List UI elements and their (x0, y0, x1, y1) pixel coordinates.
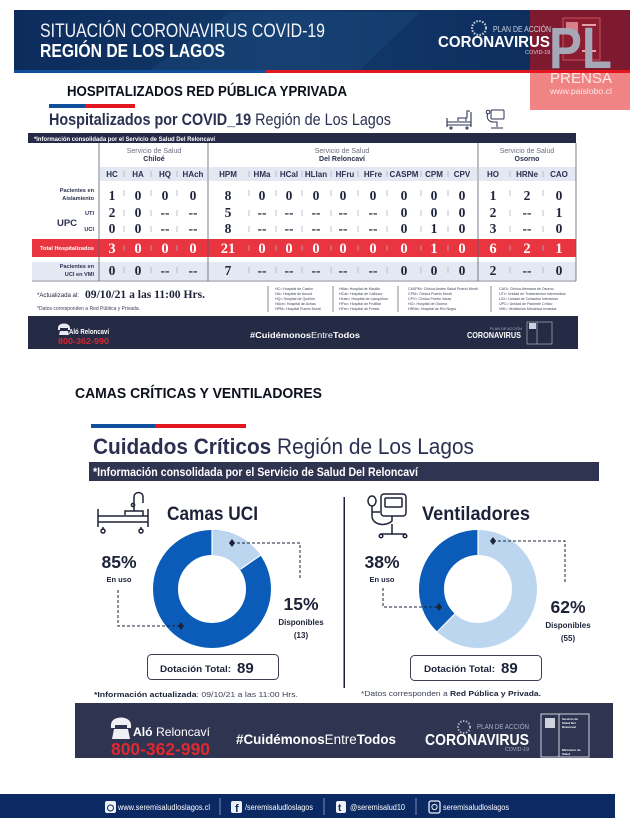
instagram link (429, 801, 509, 813)
row: VMI: -- (284, 263, 294, 278)
hospital table panel (28, 133, 576, 281)
row: UCI: -- (188, 221, 198, 236)
column header band: HCal (280, 170, 298, 179)
row: aislamiento: 0 (431, 188, 438, 203)
abbreviations legend: CPM= Clínica Puerto Montt (408, 292, 452, 296)
row: UCI: 0 (135, 221, 142, 236)
column header band: HMa (254, 170, 271, 179)
row: UTI: -- (338, 205, 348, 220)
total box: ventiladores: Dotación Total: (424, 664, 495, 675)
row: UCI: -- (284, 221, 294, 236)
abbreviations legend: CASPM= Clínica Andes Salud Puerto Montt (408, 287, 478, 291)
callout: 62% disponibles: (55) (561, 634, 575, 643)
row: total: 6 (489, 241, 497, 257)
abbreviations legend: HPM= Hospital Puerto Montt (275, 307, 321, 311)
abbreviations legend: HRNe= Hospital de Río Negro (408, 307, 456, 311)
row: aislamiento: 1 (109, 188, 116, 203)
row: UTI: 1 (556, 205, 563, 220)
row: VMI: -- (188, 263, 198, 278)
row: total: 0 (189, 241, 197, 257)
social media footer (0, 794, 615, 818)
alo reloncavi small: Aló Reloncaví (69, 329, 110, 336)
total box: camas UCI (148, 654, 278, 680)
row: UCI: -- (522, 221, 532, 236)
row labels: UCI (84, 227, 94, 233)
row: UCI: 0 (109, 221, 116, 236)
row: total: 1 (430, 241, 438, 257)
row: VMI: -- (312, 263, 320, 278)
VMI row band (32, 262, 576, 280)
row labels: UCI en VMI (65, 272, 94, 278)
row: UTI: 5 (225, 205, 232, 220)
row: VMI: 0 (459, 263, 466, 278)
row: aislamiento: 0 (135, 188, 142, 203)
row: VMI: 0 (109, 263, 116, 278)
row labels: Pacientes en (60, 264, 95, 270)
abbreviations legend: HFru= Hospital de Frutillar (339, 302, 382, 306)
row: total: 0 (312, 241, 320, 257)
abbreviations legend: HCal= Hospital de Calbuco (339, 292, 382, 296)
abbreviations legend: UCI= Unidad de Cuidados Intensivos (499, 297, 558, 301)
abbreviations legend: UPC= Unidad de Paciente Crítico (499, 302, 552, 306)
row labels: UPC (57, 218, 77, 229)
total row band (32, 239, 576, 257)
government logo: Servicio de (562, 717, 578, 721)
row: total: 0 (339, 241, 347, 257)
watermark url: www.paislobo.cl (549, 87, 612, 96)
donut chart: ventiladores (412, 523, 544, 655)
total box: camas UCI: Dotación Total: (160, 664, 231, 675)
service group headers: Osorno (515, 156, 539, 163)
website link (105, 801, 210, 813)
abbreviations legend: HC= Hospital de Castro (275, 287, 313, 291)
table title: Hospitalizados por COVID_19 Región de Los Lagos (49, 110, 391, 129)
update note (37, 287, 205, 312)
service group headers: Servicio de Salud (500, 148, 554, 155)
row: total: 0 (161, 241, 169, 257)
phone number small: 800-362-990 (58, 336, 109, 346)
row: VMI: -- (258, 263, 266, 278)
row: aislamiento: 0 (259, 188, 266, 203)
phone number: 800-362-990 (111, 739, 210, 759)
update note: 09/10/21 a las 11:00 Hrs. (85, 287, 205, 301)
coronavirus logo small: PLAN DE ACCIÓN (490, 326, 522, 331)
PRENSA label: PRENSA (550, 70, 612, 87)
row labels: Aislamiento (62, 196, 95, 202)
service group headers: Servicio de Salud (315, 148, 369, 155)
row: aislamiento: 0 (313, 188, 320, 203)
hashtag: #CuidémonosEntreTodos (236, 732, 396, 747)
row: UCI: -- (258, 221, 266, 236)
row: aislamiento: 0 (286, 188, 293, 203)
abbreviations legend: CAO= Clínica Alemana de Osorno (499, 287, 554, 291)
service group headers: Chiloé (143, 156, 165, 163)
table info bar: *Información consolidada por el Servicio de Salud Del Reloncaví (34, 136, 215, 143)
coronavirus logo: COVID-19 (505, 747, 529, 753)
icon: hospital bed small (447, 111, 471, 129)
header coronavirus logo: COVID-19 (525, 50, 550, 56)
column header band: HFru (336, 170, 354, 179)
row: UTI: -- (522, 205, 532, 220)
panel: camas UCI (94, 492, 324, 699)
government logo: Reloncaví (562, 725, 576, 729)
service group headers: Del Reloncaví (319, 156, 366, 163)
row: UCI: 0 (556, 221, 563, 236)
row: UTI: 0 (401, 205, 408, 220)
row: VMI: 0 (556, 263, 563, 278)
government logo in watermark (563, 18, 600, 60)
website link: www.seremisaludloslagos.cl (117, 803, 210, 812)
callout: 15% disponibles (229, 539, 324, 640)
government logo: Salud (562, 752, 570, 756)
column header band: HC (106, 170, 118, 179)
row: aislamiento: 0 (459, 188, 466, 203)
row: UTI: 0 (431, 205, 438, 220)
facebook link (231, 801, 313, 815)
abbreviations legend: VMI= Ventilación Mecánica Invasiva (499, 307, 556, 311)
row: UCI: 0 (401, 221, 408, 236)
row labels: Pacientes en (60, 188, 95, 194)
callout: 62% disponibles: Disponibles (545, 621, 591, 630)
row: aislamiento: 0 (401, 188, 408, 203)
row: VMI: 0 (431, 263, 438, 278)
column header band: HLlan (305, 170, 327, 179)
row: VMI: -- (522, 263, 532, 278)
coronavirus logo small: CORONAVIRUS (467, 331, 522, 340)
column separator ticks (124, 171, 543, 280)
header coronavirus logo: PLAN DE ACCIÓN (493, 25, 551, 34)
instagram link: seremisaludloslagos (443, 803, 509, 812)
government logo: Ministerio de (562, 748, 581, 752)
abbreviations legend: HO= Hospital de Osorno (408, 302, 447, 306)
tricolor rule (49, 104, 135, 108)
row: total: 1 (555, 241, 563, 257)
row: aislamiento: 1 (490, 188, 497, 203)
row: UCI: -- (338, 221, 348, 236)
abbreviations legend (268, 286, 566, 312)
row: total: 0 (258, 241, 266, 257)
abbreviations legend: HQ= Hospital de Quellón (275, 297, 315, 301)
icon: phone small (58, 324, 70, 335)
row: total: 3 (108, 241, 116, 257)
row: VMI: 0 (135, 263, 142, 278)
panel divider (344, 497, 345, 688)
row: aislamiento: 0 (162, 188, 169, 203)
row: VMI: -- (160, 263, 170, 278)
column header band: HAch (183, 170, 204, 179)
row: total: 0 (458, 241, 466, 257)
table footer banner (28, 316, 578, 349)
header coronavirus logo: CORONAVIRUS (438, 34, 550, 51)
row: UCI: -- (160, 221, 170, 236)
icon: ventilator (368, 494, 407, 538)
total box: ventiladores (410, 656, 542, 680)
watermark: PL Prensa (530, 10, 630, 110)
row: aislamiento: 0 (370, 188, 377, 203)
abbreviations legend: HLlan= Hospital de Llanquihue (339, 297, 388, 301)
update note: *Datos corresponden a Red Pública y Privada. (37, 306, 140, 312)
service group headers: Servicio de Salud (127, 148, 181, 155)
row: VMI: 2 (490, 263, 497, 278)
table dividers (32, 143, 576, 281)
coronavirus logo: PLAN DE ACCIÓN (477, 722, 529, 731)
facebook link: f (235, 803, 239, 815)
row: total: 0 (285, 241, 293, 257)
alo reloncavi: Aló Reloncaví (133, 725, 211, 739)
critical care info bar: *Información consolidada por el Servicio de Salud Del Reloncaví (93, 465, 419, 479)
row: UCI: 1 (431, 221, 438, 236)
note: update date: *Información actualizada : 09/10/21 a las 11:00 Hrs. (94, 690, 298, 699)
row: aislamiento: 0 (190, 188, 197, 203)
row: UTI: -- (188, 205, 198, 220)
row: VMI: -- (338, 263, 348, 278)
government logo small (527, 322, 552, 344)
ventiladores title: Ventiladores (422, 503, 530, 525)
hashtag small: #Cuidémonos EntreTodos (250, 330, 360, 340)
camas UCI title: Camas UCI (167, 503, 258, 525)
callout: 62% disponibles (490, 537, 591, 643)
row: VMI: 7 (225, 263, 232, 278)
column header band: HFre (364, 170, 383, 179)
row: UTI: -- (160, 205, 170, 220)
column header band: CPM (425, 170, 443, 179)
heading: camas criticas: CAMAS CRÍTICAS Y VENTILADORES (75, 385, 322, 402)
row: UTI: -- (312, 205, 320, 220)
abbreviations legend: HAch= Hospital de Achao (275, 302, 316, 306)
row labels (57, 188, 95, 278)
PL letters: PL (549, 16, 612, 81)
total box: ventiladores: 89 (501, 660, 518, 677)
total row band: Total Hospitalizados (40, 246, 94, 252)
column header band: CAO (550, 170, 568, 179)
header title (40, 20, 325, 61)
critical care info bar (89, 462, 599, 481)
coronavirus logo (425, 721, 529, 753)
row: aislamiento: 2 (524, 188, 531, 203)
column header band: HPM (219, 170, 237, 179)
coronavirus logo: CORONAVIRUS (425, 732, 529, 749)
service group headers (127, 148, 554, 163)
row: aislamiento: 0 (340, 188, 347, 203)
callout: 62% disponibles: 62% (550, 597, 586, 617)
column header band (100, 167, 576, 181)
table info bar (28, 133, 576, 143)
row: UTI: 0 (459, 205, 466, 220)
row: total: 0 (134, 241, 142, 257)
callout: 38% en uso: En uso (369, 575, 395, 584)
abbreviations legend: UTI= Unidad de Tratamientos Intermedios (499, 292, 566, 296)
row: UCI: 8 (225, 221, 232, 236)
callout: 85% en uso: 85% (101, 552, 137, 572)
row: UTI: -- (258, 205, 266, 220)
row: UCI: -- (312, 221, 320, 236)
top header banner (14, 10, 628, 73)
tricolor rule critical care (91, 424, 246, 428)
row: UCI: -- (368, 221, 378, 236)
facebook link: /seremisaludloslagos (245, 803, 313, 812)
row: total: 0 (400, 241, 408, 257)
row: VMI: -- (368, 263, 378, 278)
row: UTI: 0 (135, 205, 142, 220)
column header band: CPV (454, 170, 471, 179)
twitter link (336, 801, 405, 814)
twitter link: t (338, 803, 342, 814)
row: UTI: 2 (490, 205, 497, 220)
icon: telephone (111, 718, 131, 739)
callout: 38% en uso (364, 552, 442, 611)
row: UTI: 2 (109, 205, 116, 220)
row labels: UTI (85, 211, 94, 217)
callout: 15% disponibles: 15% (283, 594, 319, 614)
row: UTI: -- (368, 205, 378, 220)
row: UCI: 0 (459, 221, 466, 236)
callout: 15% disponibles: (13) (294, 631, 308, 640)
callout: 38% en uso: 38% (364, 552, 400, 572)
column header band: HQ (159, 170, 171, 179)
total box: camas UCI: 89 (237, 660, 254, 677)
abbreviations legend: HMa= Hospital de Maullín (339, 287, 380, 291)
abbreviations legend: CPV= Clínica Puerto Varas (408, 297, 451, 301)
callout: 85% en uso (101, 552, 184, 630)
header coronavirus logo (438, 21, 551, 56)
header title: REGIÓN DE LOS LAGOS (40, 40, 225, 61)
icon: ventilator small (486, 110, 504, 128)
column header band: HA (132, 170, 144, 179)
column header band: CASPM (390, 170, 419, 179)
government logo: Salud Del (562, 721, 576, 725)
column header band: HRNe (516, 170, 538, 179)
panel: ventiladores (361, 494, 591, 698)
government logo (541, 714, 589, 757)
abbreviations legend: HA= Hospital de Ancud (275, 292, 312, 296)
critical care footer banner (75, 703, 613, 759)
row: aislamiento: 0 (556, 188, 563, 203)
coronavirus logo small (467, 326, 522, 340)
row: total: 0 (369, 241, 377, 257)
header title: SITUACIÓN CORONAVIRUS COVID-19 (40, 20, 325, 42)
donut chart: camas UCI (166, 530, 260, 636)
twitter link: @seremisalud10 (350, 803, 405, 812)
column header band: HO (487, 170, 499, 179)
row: total: 2 (523, 241, 531, 257)
row: UTI: -- (284, 205, 294, 220)
update note: *Actualizada al: (37, 292, 79, 299)
heading: hospitalizados: HOSPITALIZADOS RED PÚBLICA YPRIVADA (67, 82, 347, 100)
abbreviations legend: HFre= Hospital de Fresia (339, 307, 379, 311)
callout: 85% en uso: En uso (106, 575, 132, 584)
row: VMI: 0 (401, 263, 408, 278)
callout: 15% disponibles: Disponibles (278, 618, 324, 627)
icon: hospital bed (98, 492, 148, 533)
note: data source: *Datos corresponden a Red Pública y Privada. (361, 689, 541, 698)
row: total: 21 (221, 241, 235, 257)
row: UCI: 3 (490, 221, 497, 236)
row: aislamiento: 8 (225, 188, 232, 203)
critical care title: Cuidados Críticos Región de Los Lagos (93, 434, 474, 459)
